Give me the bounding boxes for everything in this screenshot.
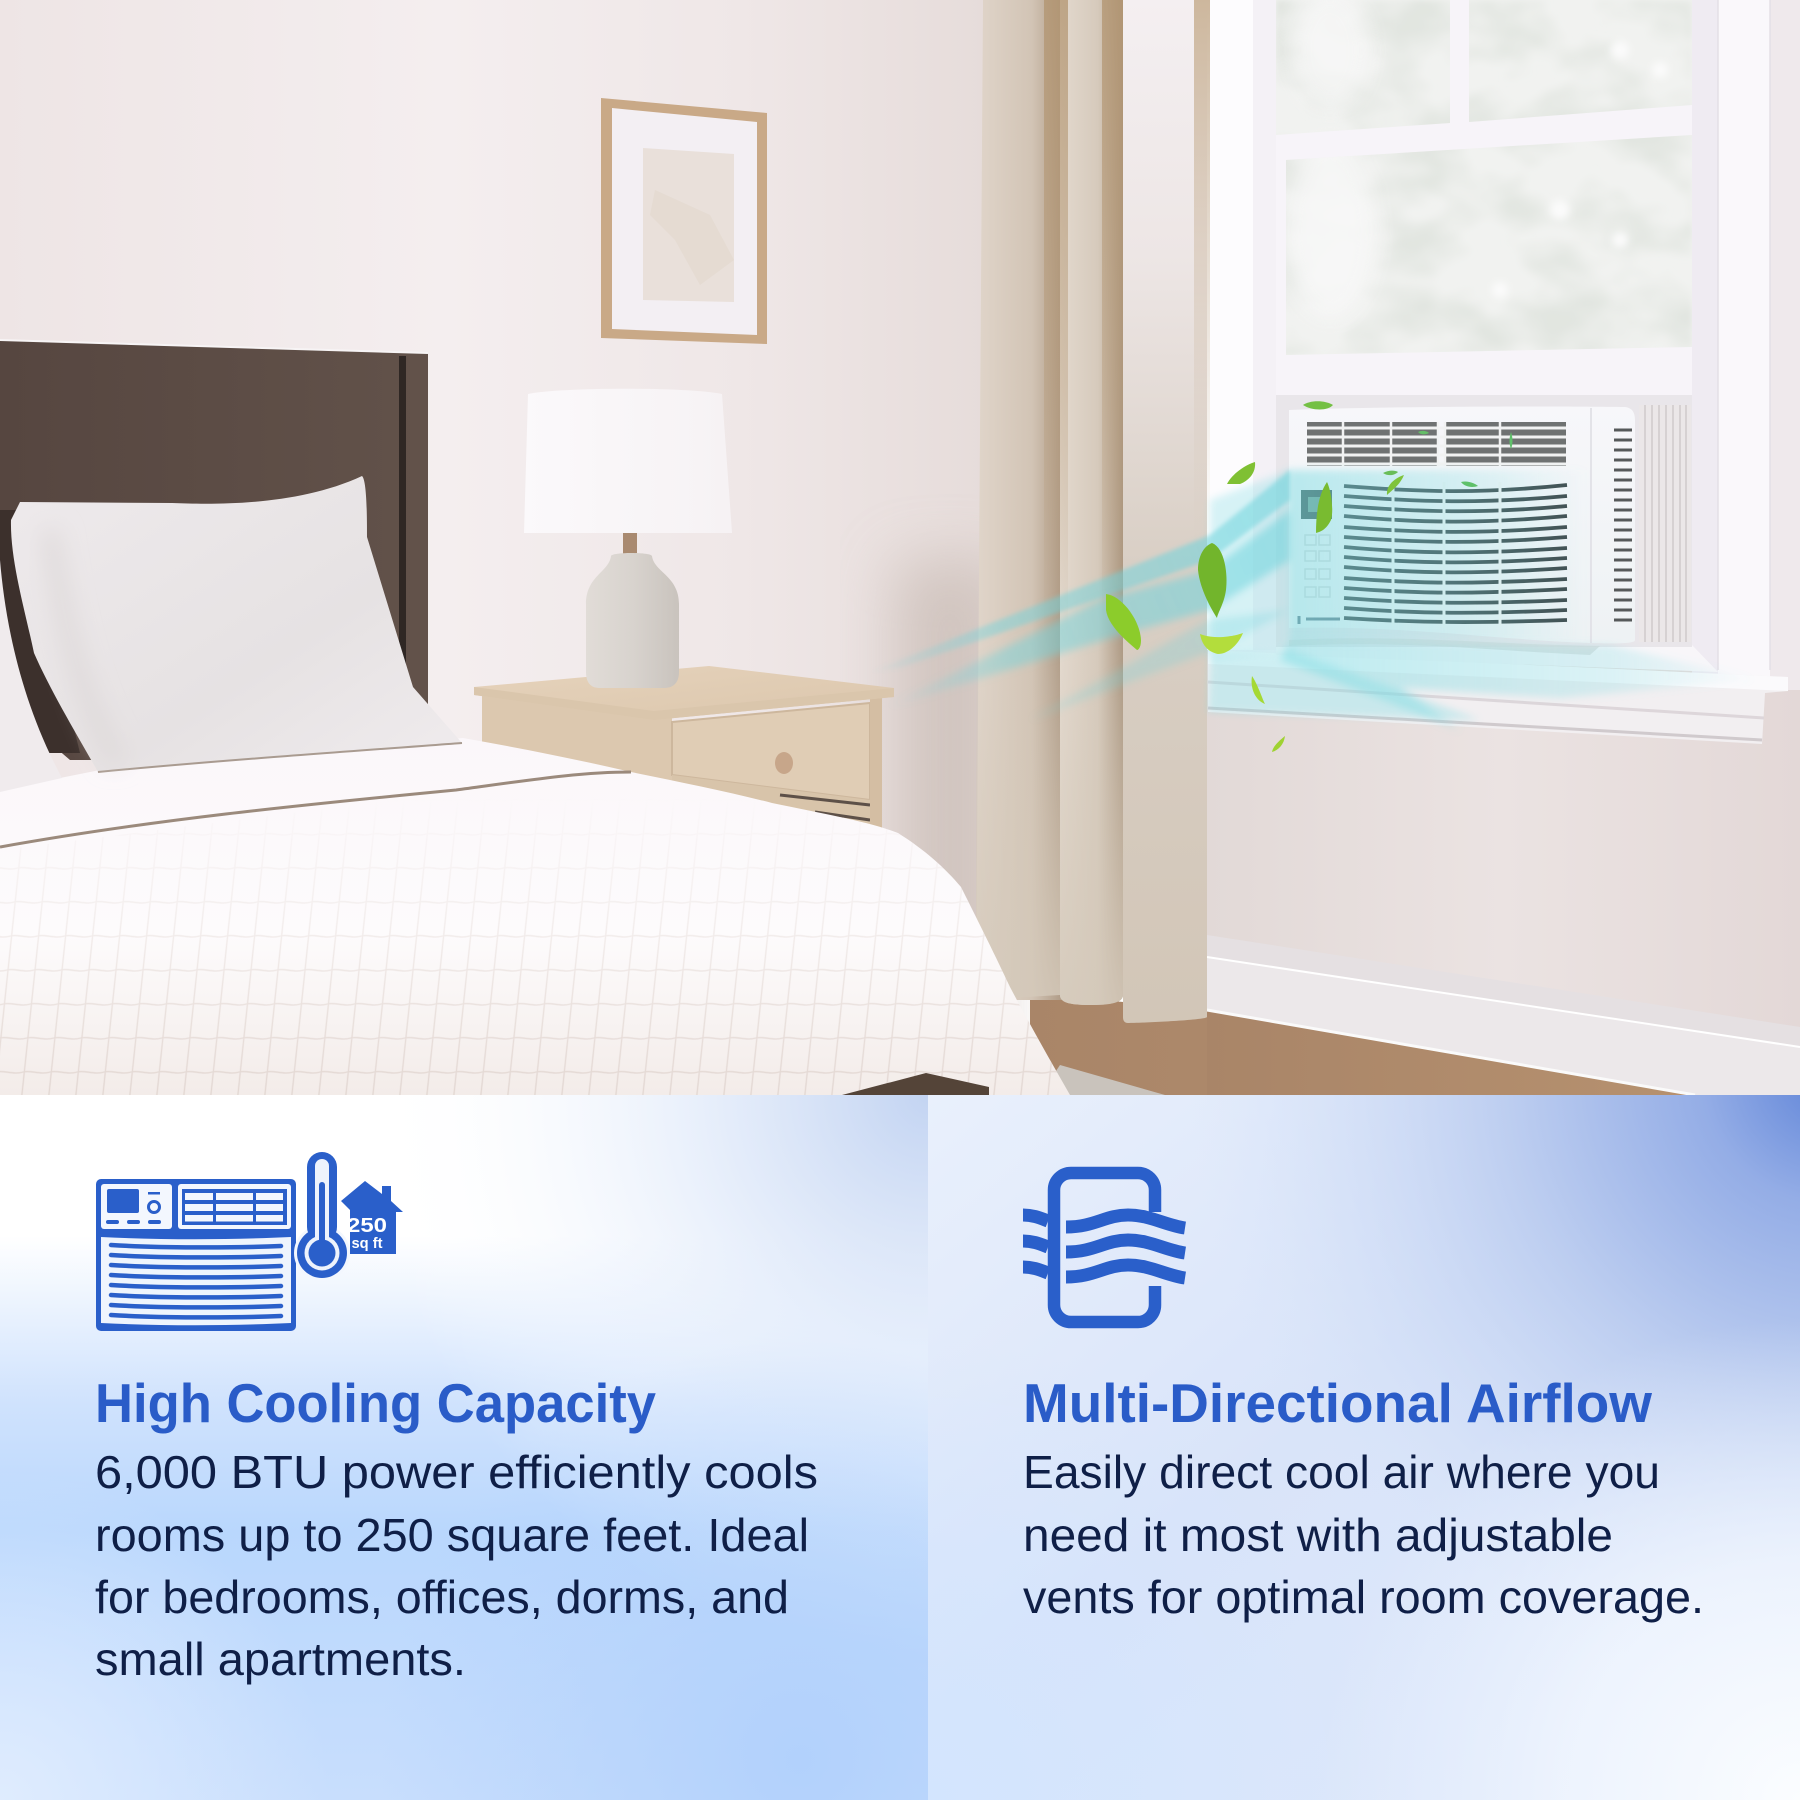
panel: High Cooling Capacity: [0, 1095, 928, 1800]
icon: air conditioner with thermometer and house: sq ft: [352, 1236, 383, 1252]
cool air streams: [870, 470, 1760, 730]
floor and rug: [1030, 1000, 1207, 1095]
icon: air conditioner with thermometer and house: 250: [347, 1215, 387, 1237]
accordion side panel: [1644, 405, 1687, 642]
window: [1210, 0, 1800, 690]
text block: cooling capacity description: small apartments.: [95, 1633, 466, 1685]
text block: cooling capacity description: for bedrooms, offices, dorms, and: [95, 1571, 789, 1623]
panel background: [0, 1095, 928, 1800]
icon: air conditioner with thermometer and house: [96, 1152, 403, 1331]
wall: [0, 0, 1005, 1120]
air conditioner unit: [1276, 395, 1692, 655]
quilt stitching: [0, 862, 1057, 1095]
right wall and baseboard: [1207, 650, 1800, 1095]
top vents: [1307, 422, 1566, 466]
front grille: [1344, 482, 1567, 628]
window sill: [1208, 645, 1788, 744]
green leaves: [1106, 401, 1512, 752]
icon: airflow through vent: [1023, 1173, 1185, 1322]
second pillow: [0, 560, 62, 792]
text block: airflow description: [1023, 1446, 1704, 1623]
text block: cooling capacity description: [95, 1446, 818, 1685]
bed cover: [0, 738, 1070, 1095]
panel: Multi-Directional Airflow: [928, 1095, 1800, 1800]
control panel: [1299, 490, 1340, 624]
table lamp: [524, 389, 732, 688]
text block: airflow description: vents for optimal room coverage.: [1023, 1571, 1704, 1623]
framed art: [601, 98, 767, 344]
text block: cooling capacity description: 6,000 BTU power efficiently cools: [95, 1446, 818, 1498]
nightstand: [474, 666, 894, 828]
curtain: [976, 0, 1210, 1023]
text block: airflow description: need it most with adjustable: [1023, 1509, 1613, 1561]
heading: High Cooling Capacity: High Cooling Capacity: [95, 1372, 656, 1434]
headboard: [0, 340, 428, 760]
unit body: [1289, 406, 1635, 643]
fold line: [0, 772, 631, 847]
text block: airflow description: Easily direct cool air where you: [1023, 1446, 1660, 1498]
heading: Multi-Directional Airflow: Multi-Directional Airflow: [1023, 1372, 1652, 1434]
panel background: [928, 1095, 1800, 1800]
bed: [0, 738, 1070, 1095]
pillow: [11, 476, 462, 772]
text block: cooling capacity description: rooms up to 250 square feet. Ideal: [95, 1509, 809, 1561]
bed base corner: [842, 1073, 989, 1095]
bedroom photo scene: [0, 0, 1800, 1120]
side vent: [1614, 430, 1632, 620]
